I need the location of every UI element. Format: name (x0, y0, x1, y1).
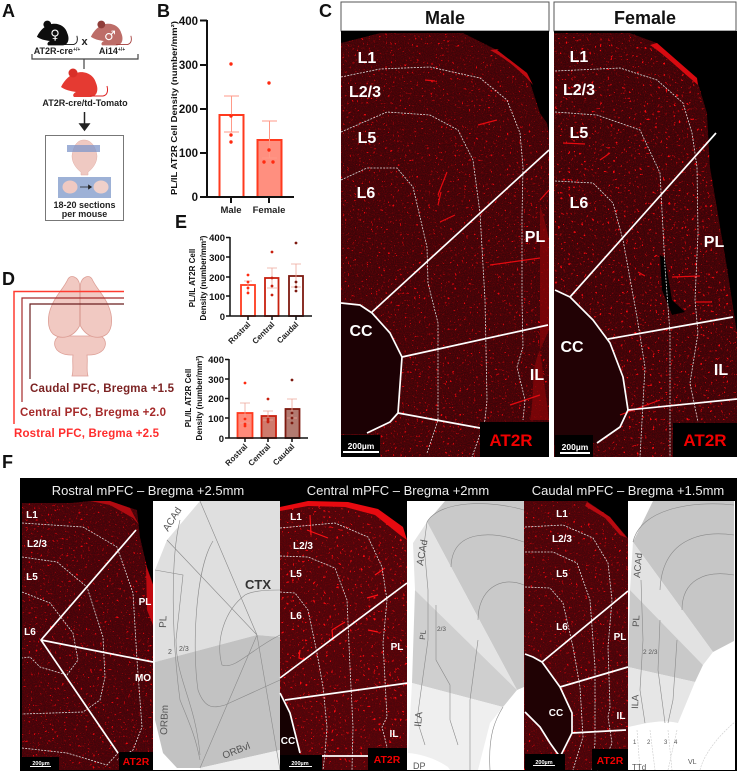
caudal atlas: 3 (664, 740, 668, 746)
rostral section (22, 483, 280, 770)
scale bar (22, 757, 59, 770)
layer labels: L5 (556, 569, 568, 580)
layer labels: MO (135, 673, 151, 684)
rostral atlas: 2 (168, 649, 172, 656)
male bar chart: Caudal (275, 320, 300, 345)
region outlines (41, 530, 153, 753)
caudal title: Caudal mPFC – Bregma +1.5mm (532, 483, 724, 498)
caudal atlas: 2 (647, 740, 651, 746)
y axis title: PL/IL AT2R Cell Density (number/mm²) (170, 21, 179, 195)
male bar chart: 300 (209, 253, 225, 264)
central atlas: DP (413, 761, 426, 771)
male layer labels: L6 (357, 185, 375, 202)
female layer labels: PL (704, 234, 724, 251)
rostral atlas: ORBvl (221, 741, 252, 762)
layer labels (24, 510, 151, 684)
x labels: Female (253, 205, 285, 216)
caudal atlas (628, 501, 735, 772)
scale bar: 200µm (535, 760, 553, 766)
layer lines (22, 523, 142, 765)
male layer labels: L1 (358, 50, 376, 67)
icon: brain with section band (67, 140, 100, 175)
panel letter B: B (157, 1, 170, 21)
male layer labels: CC (349, 323, 373, 340)
male bar chart (188, 233, 312, 346)
caudal section (524, 483, 735, 772)
rostral atlas: CTX (245, 577, 271, 592)
data points (229, 62, 275, 164)
panel A: breeding scheme (2, 1, 138, 220)
layer labels: L2/3 (293, 541, 313, 552)
AT2R tag female: AT2R (683, 431, 727, 450)
panel C: male and female micrographs (319, 1, 737, 457)
male bar chart: Rostral (227, 320, 252, 346)
layer labels: L5 (290, 569, 302, 580)
layer labels: L6 (556, 622, 568, 633)
y axis title: PL/IL AT2R Cell (184, 369, 193, 427)
rostral atlas: PL (158, 615, 169, 628)
female layer labels: L6 (570, 195, 588, 212)
panel letter C: C (319, 1, 332, 21)
caudal atlas: ILA (630, 694, 642, 709)
male bar chart: 400 (209, 233, 225, 244)
AT2R tag (592, 749, 628, 770)
layer labels: IL (390, 729, 398, 740)
layer lines (525, 525, 612, 770)
icon: red offspring mouse (61, 68, 108, 97)
y tick labels: 200 (179, 104, 198, 116)
AT2R tag: AT2R (123, 756, 150, 768)
panel letter E: E (175, 212, 187, 232)
y axis title: Density (number/mm²) (195, 355, 204, 440)
male layer labels: PL (525, 229, 545, 246)
layer labels (549, 509, 626, 722)
layer labels: PL (391, 642, 403, 653)
caudal atlas: 4 (674, 740, 678, 746)
x labels: Male (220, 205, 242, 216)
female layer labels: L5 (570, 125, 588, 142)
panel D: brain with Bregma levels (2, 269, 175, 440)
female bar chart: Central (247, 442, 272, 468)
icon: pink male mouse: ♂ (104, 29, 116, 44)
female header: Female (614, 8, 676, 28)
icon: pink male mouse (91, 21, 131, 45)
AT2R tag: AT2R (374, 754, 401, 766)
central section (280, 483, 524, 771)
rostral atlas: ACAd (161, 506, 184, 534)
panel letter F: F (2, 452, 13, 472)
layer boundaries (341, 67, 525, 457)
layer labels (281, 512, 403, 747)
layer boundaries (555, 68, 698, 457)
strain label AT2R-cre: +/+ (73, 47, 80, 53)
AT2R tag male (480, 422, 549, 457)
layer labels: L6 (290, 611, 302, 622)
male layer labels (349, 50, 545, 384)
layer labels: CC (281, 736, 295, 747)
multiplication sign: x (81, 36, 88, 48)
central label: Central PFC, Bregma +2.0 (20, 407, 166, 419)
central title: Central mPFC – Bregma +2mm (307, 483, 489, 498)
panel letter A: A (2, 1, 15, 21)
female header (554, 2, 736, 31)
strain label Ai14: Ai14 (99, 46, 118, 56)
y tick labels: 100 (179, 148, 198, 160)
rostral atlas: 2/3 (179, 646, 189, 653)
icon: mouse brain dorsal view (48, 277, 112, 376)
caudal atlas: PL (631, 615, 642, 627)
female bar chart: 200 (208, 394, 224, 405)
rostral title: Rostral mPFC – Bregma +2.5mm (52, 483, 244, 498)
scale bar (280, 755, 322, 770)
layer labels: PL (139, 597, 151, 608)
scale bar: 200µm (291, 761, 309, 767)
caudal atlas: 2 2/3 (643, 649, 658, 656)
strain label AT2R-cre: AT2R-cre (34, 46, 73, 56)
y axis title: Density (number/mm²) (199, 235, 208, 320)
female bar chart: 100 (208, 414, 224, 425)
scale bar male (341, 435, 380, 457)
y tick labels: 0 (192, 192, 198, 204)
icon: black female mouse: ♀ (50, 28, 60, 43)
layer labels: IL (617, 711, 625, 722)
rostral atlas: ORBm (159, 705, 171, 735)
female bar chart: Caudal (271, 442, 296, 467)
central atlas: PL (418, 629, 428, 640)
error bars (224, 96, 277, 158)
layer labels: L1 (26, 510, 38, 521)
axes (200, 20, 294, 203)
panel F: rostro-caudal micrographs with atlas (2, 452, 737, 772)
female layer labels: L2/3 (563, 82, 595, 99)
arrow down (80, 112, 89, 130)
layer labels: L1 (556, 509, 568, 520)
male micrograph (341, 2, 549, 457)
female layer labels: CC (560, 339, 584, 356)
rostral atlas (153, 501, 280, 770)
box: sectioning scheme (46, 136, 124, 220)
female bar chart (184, 355, 308, 468)
panel letter D: D (2, 269, 15, 289)
layer lines (280, 523, 387, 770)
strain label Ai14: +/+ (118, 47, 125, 53)
PL IL CC outlines (341, 150, 549, 433)
layer labels: L2/3 (27, 539, 47, 550)
male header (341, 2, 549, 31)
layer labels: PL (614, 632, 626, 643)
caudal label: Caudal PFC, Bregma +1.5 (30, 383, 175, 395)
offspring label: AT2R-cre/td-Tomato (42, 98, 128, 108)
cross bracket (32, 54, 138, 69)
male bar chart: Central (251, 320, 276, 346)
y tick labels: 300 (179, 60, 198, 72)
layer labels: L5 (26, 572, 38, 583)
layer labels: L2/3 (552, 534, 572, 545)
male layer labels: L2/3 (349, 84, 381, 101)
region outlines (280, 583, 408, 756)
central atlas: 2/3 (437, 626, 446, 633)
bars (220, 115, 282, 197)
AT2R tag (368, 748, 407, 770)
scale bar female (555, 435, 593, 457)
scale bar (525, 754, 565, 770)
female micrograph (554, 2, 737, 457)
female layer labels: IL (714, 362, 728, 379)
central atlas (407, 501, 524, 771)
female bar chart: 400 (208, 355, 224, 366)
layer labels: L1 (290, 512, 302, 523)
caudal atlas: VL (688, 759, 697, 766)
AT2R tag (119, 752, 153, 770)
female layer labels (560, 49, 728, 379)
male bar chart: 100 (209, 292, 225, 303)
male header: Male (425, 8, 465, 28)
section count text: per mouse (62, 209, 107, 219)
male bar chart: 200 (209, 273, 225, 284)
icon: coronal sections on blue (58, 177, 111, 198)
y axis title: PL/IL AT2R Cell (188, 249, 197, 307)
black frame (20, 478, 737, 771)
male layer labels: IL (530, 367, 544, 384)
female bar chart: 300 (208, 375, 224, 386)
region outlines (525, 591, 628, 757)
caudal atlas: 1 (633, 740, 637, 746)
central atlas: ILA (413, 711, 425, 727)
female bar chart: Rostral (224, 442, 249, 468)
female bar chart: 0 (219, 434, 224, 445)
Bregma level lines (14, 292, 124, 424)
layer labels: L6 (24, 627, 36, 638)
female layer labels: L1 (570, 49, 588, 66)
scale bar male: 200µm (348, 441, 375, 451)
PL IL CC outlines (555, 133, 737, 443)
scale bar female: 200µm (562, 442, 589, 452)
male layer labels: L5 (358, 130, 376, 147)
caudal atlas: ACAd (632, 553, 645, 578)
central atlas: ACAd (415, 539, 430, 567)
y tick labels (179, 16, 198, 204)
x labels (220, 205, 285, 216)
layer labels: CC (549, 708, 563, 719)
icon: black female mouse (37, 21, 77, 45)
panel B: bar chart male vs female (157, 1, 294, 216)
scale bar: 200µm (32, 761, 50, 767)
AT2R tag female (673, 423, 737, 457)
male bar chart: 0 (220, 312, 225, 323)
AT2R tag male: AT2R (489, 431, 533, 450)
y tick labels: 400 (179, 16, 198, 28)
panel E: rostro-caudal bar charts (175, 212, 312, 468)
AT2R tag: AT2R (597, 755, 624, 767)
rostral label: Rostral PFC, Bregma +2.5 (14, 428, 160, 440)
caudal atlas: TTd (632, 763, 646, 772)
section count text: 18-20 sections (53, 200, 116, 210)
